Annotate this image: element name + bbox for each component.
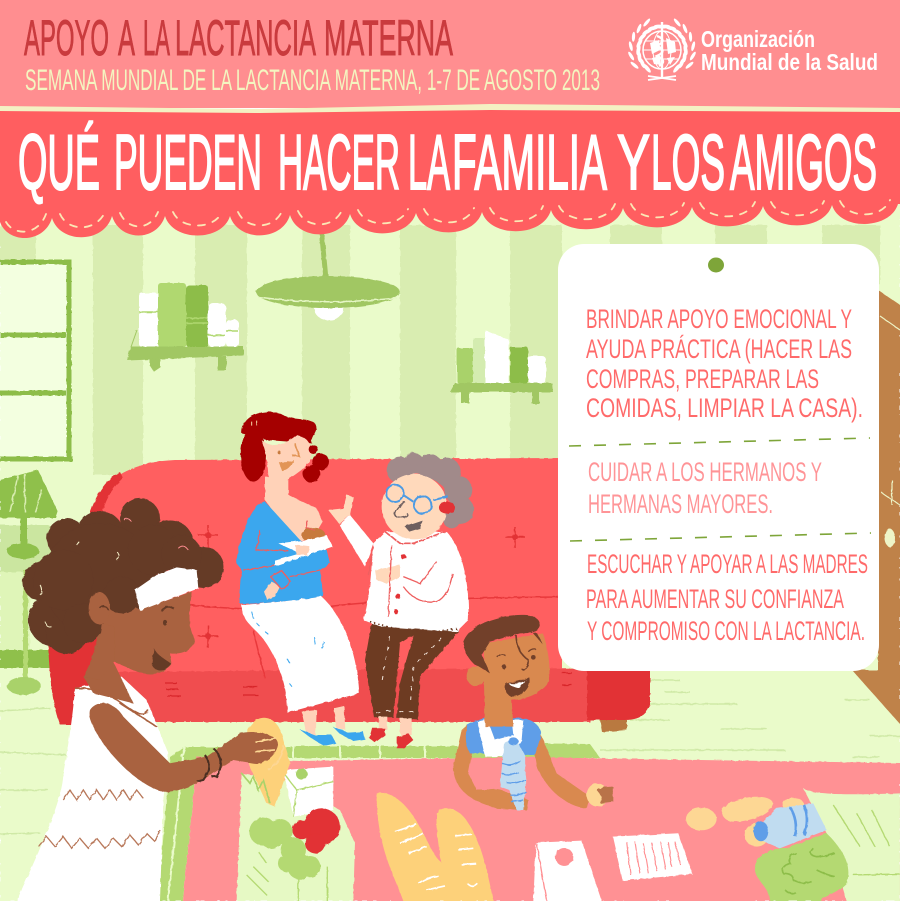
bookshelf left <box>128 283 243 371</box>
main heading: QUÉ <box>18 118 100 206</box>
woman with bread <box>17 498 224 901</box>
paper bag and note <box>533 833 692 901</box>
door <box>852 290 900 724</box>
table lamp <box>0 470 58 652</box>
ceiling lamp <box>256 232 400 320</box>
sofa <box>48 458 650 732</box>
right groceries <box>686 788 900 901</box>
grandmother <box>328 453 474 748</box>
main heading: PUEDEN <box>114 118 262 206</box>
grocery bag <box>237 718 355 901</box>
main heading: HACER <box>278 118 400 206</box>
floor lamp <box>7 570 41 695</box>
floor planks <box>0 680 900 834</box>
floor tiles strip <box>170 743 600 758</box>
title: LA <box>143 10 170 66</box>
title: MATERNA <box>324 10 453 66</box>
rug <box>183 757 900 901</box>
main heading: LA <box>408 118 450 206</box>
icon: WHO emblem <box>627 18 697 80</box>
text block: listening <box>586 549 868 646</box>
bookshelf right <box>450 330 553 404</box>
woman's arm and bracelets <box>90 703 283 792</box>
main heading: FAMILIA <box>452 118 607 206</box>
title <box>24 10 453 66</box>
title: A <box>118 10 135 66</box>
main heading: Y <box>617 118 650 206</box>
wall stripes <box>0 225 880 475</box>
title: LACTANCIA <box>175 10 316 66</box>
bread loaves <box>377 793 493 901</box>
organization name: Organización <box>701 26 815 52</box>
main heading <box>18 118 877 206</box>
pin <box>708 258 724 272</box>
skirting <box>0 650 50 668</box>
main heading: LOS <box>651 118 725 206</box>
cream line <box>0 104 900 114</box>
boy with bottle <box>453 615 613 810</box>
text block: emotional support <box>586 304 863 423</box>
text block: siblings: HERMANAS MAYORES. <box>588 489 773 519</box>
window <box>0 262 73 459</box>
title: APOYO <box>24 10 109 66</box>
illustrated room scene <box>0 200 900 901</box>
mother <box>237 412 365 746</box>
panel: family and friends actions <box>558 244 879 671</box>
header band <box>0 0 900 108</box>
organization name <box>701 26 878 75</box>
text block: siblings <box>588 457 822 519</box>
red banner with scalloped curtain <box>0 110 900 238</box>
